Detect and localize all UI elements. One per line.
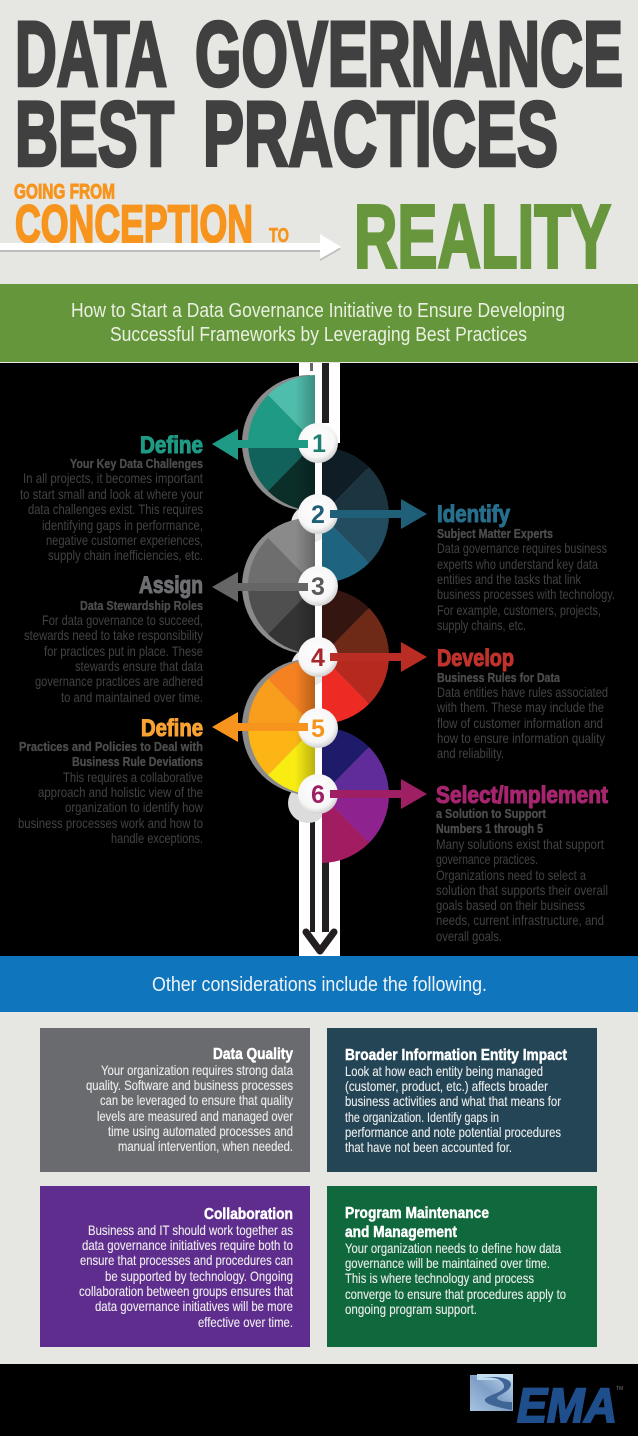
banner: green intro: Successful Frameworks by Leveraging Best Practices [110,324,527,346]
text block: define practices [18,715,204,846]
text block: define practices: approach and holistic view of the [38,784,203,800]
panel: broader information entity impact: (customer, product, etc.) affects broader [345,1078,548,1094]
text block: define challenges: Your Key Data Challenges [70,456,203,471]
text block: develop rules [436,645,608,761]
badge 2 with arrow: 2 [311,501,325,529]
text block: define challenges: negative customer experiences, [46,532,203,548]
text block: assign roles: stewards ensure that data [75,658,203,674]
panel: collaboration [40,1186,310,1347]
logo: EMA: TM [616,1386,623,1392]
banner: other considerations: Other considerations include the following. [152,974,487,996]
text block: define practices: business processes work and how to [18,815,203,831]
banner: other considerations [0,956,638,1012]
text block: define practices: This requires a collaborative [63,769,203,785]
text block: assign roles [24,572,203,705]
panel: broader information entity impact [327,1028,597,1172]
panel: data quality: time using automated processes and [108,1123,293,1139]
text block: select and implement: goals based on their business [436,897,585,913]
text block: develop rules: Develop [437,645,514,672]
text block: select and implement: Numbers 1 through 5 [436,821,543,836]
text block: select and implement: a Solution to Support [436,806,547,821]
panel: data quality: Your organization requires strong data [101,1062,293,1078]
panel: data quality: manual intervention, when needed. [118,1138,293,1154]
text block: define practices: organization to identify how [65,799,204,815]
panel: program maintenance and management: ongoing program support. [345,1301,477,1317]
text block: define challenges [20,432,203,563]
panel: program maintenance and management: Your organization needs to define how data [345,1240,561,1256]
badge 3 with arrow: 3 [311,573,325,601]
panel: data quality: quality. Software and business processes [86,1077,293,1093]
panel: data quality [40,1028,310,1172]
panel: collaboration: ensure that processes and procedures can [80,1252,293,1268]
text block: define practices: Define [141,715,203,742]
badge 5 with arrow: 5 [311,715,325,743]
logo: EMA: EMA [517,1380,617,1433]
text block: assign roles: governance practices are adhered [35,673,203,689]
text block: assign roles: Assign [139,572,203,599]
banner: green intro [0,284,638,362]
logo: EMA [470,1374,623,1433]
text block: assign roles: For data governance to succeed, [42,612,203,628]
panel: data quality: Data Quality [213,1046,293,1063]
panel: broader information entity impact: the organization. Identify gaps in [345,1109,499,1125]
panel: broader information entity impact: Broader Information Entity Impact [345,1047,567,1064]
text block: select and implement: Organizations need to select a [436,867,586,883]
panel: collaboration: data governance initiatives will be more [95,1298,293,1314]
badge 6 with arrow: 6 [311,781,325,809]
text block: identify experts: Identify [437,501,511,528]
text block: define challenges: In all projects, it becomes important [23,470,203,486]
text block: define challenges: identifying gaps in performance, [42,517,203,533]
text block: select and implement: overall goals. [436,928,502,944]
panel: broader information entity impact: business activities and what that means for [345,1093,561,1109]
title: BEST [15,84,174,186]
subtitle: going from conception to reality: GOING FROM [14,180,115,204]
panel: program maintenance and management: Program Maintenance [345,1205,489,1222]
badge 6 with arrow [298,774,427,814]
badge 3 with arrow [212,566,338,606]
text block: define practices: Practices and Policies to Deal with [19,739,203,754]
panel: program maintenance and management: converge to ensure that procedures apply to [345,1286,566,1302]
panel: data quality: levels are measured and managed over [97,1108,293,1124]
text block: define practices: handle exceptions. [111,830,203,846]
panel: program maintenance and management: and Management [345,1224,457,1241]
text block: develop rules: flow of customer information and [437,715,603,731]
arrow: conception to reality [0,234,341,261]
text block: select and implement: Select/Implement [436,782,608,809]
semicircle 4: red [322,588,389,724]
badge 1 with arrow [212,423,338,463]
panel: program maintenance and management: This is where technology and process [345,1270,534,1286]
panel: broader information entity impact: that have not been accounted for. [345,1139,512,1155]
text block: define practices: Business Rule Deviations [72,754,203,769]
text block: define challenges: to start small and look at where your [20,486,203,502]
panel: collaboration: Collaboration [204,1206,293,1223]
panel: black footer [0,1364,638,1436]
badge 5 with arrow [212,708,338,748]
text block: identify experts: Subject Matter Experts [437,526,553,541]
panel: collaboration: be supported by technology. Ongoing [105,1268,293,1284]
text block: assign roles: to and maintained over time. [61,689,203,705]
panel: collaboration: Business and IT should work together as [88,1222,293,1238]
panel: program maintenance and management: governance will be maintained over time. [345,1255,550,1271]
badge 1 with arrow: 1 [312,430,326,458]
text block: develop rules: and reliability. [437,745,504,761]
subtitle: going from conception to reality [14,180,611,288]
text block: identify experts: entities and the tasks that link [437,571,582,587]
panel: broader information entity impact: performance and note potential procedures [345,1124,561,1140]
text block: assign roles: stewards need to take responsibility [24,627,203,643]
text block: identify experts: experts who understand key data [437,556,598,572]
title: DATA [15,4,167,106]
badge 2 with arrow [298,494,427,534]
text block: develop rules: Business Rules for Data [437,670,561,685]
semicircle 2: blue [322,447,389,583]
badge 4 with arrow: 4 [311,644,325,672]
text block: select and implement: needs, current infrastructure, and [436,912,604,928]
text block: select and implement: governance practices. [436,851,538,867]
text block: assign roles: for practices put in place. These [44,643,203,659]
badge 4 with arrow [298,637,427,677]
semicircle 1: teal [242,375,315,511]
text block: define challenges: supply chain inefficiencies, etc. [48,547,203,563]
process spine [288,363,340,956]
text block: assign roles: Data Stewardship Roles [80,598,203,613]
text block: define challenges: Define [140,432,203,459]
panel: collaboration: effective over time. [198,1314,293,1330]
text block: identify experts [437,501,615,633]
text block: select and implement [436,782,608,944]
text block: define challenges: data challenges exist. This requires [28,501,203,517]
panel: collaboration: data governance initiatives require both to [82,1237,293,1253]
banner: green intro: How to Start a Data Governance Initiative to Ensure Developing [71,300,565,322]
panel: broader information entity impact: Look at how each entity being managed [345,1063,543,1079]
text block: develop rules: how to ensure information quality [437,730,605,746]
text block: identify experts: supply chains, etc. [437,617,526,633]
subtitle: going from conception to reality: TO [269,225,289,247]
semicircle 5: orange yellow [242,659,315,795]
text block: select and implement: Many solutions exist that support [436,836,604,852]
panel: data quality: can be leveraged to ensure that quality [100,1092,293,1108]
panel: program maintenance and management [327,1186,597,1347]
subtitle: going from conception to reality: CONCEPTION [15,195,253,254]
panel: black process section [0,363,638,956]
title [15,4,623,186]
semicircle 3: gray [242,518,315,654]
panel: collaboration: collaboration between groups ensures that [79,1283,293,1299]
semicircle 6: purple [322,727,389,863]
